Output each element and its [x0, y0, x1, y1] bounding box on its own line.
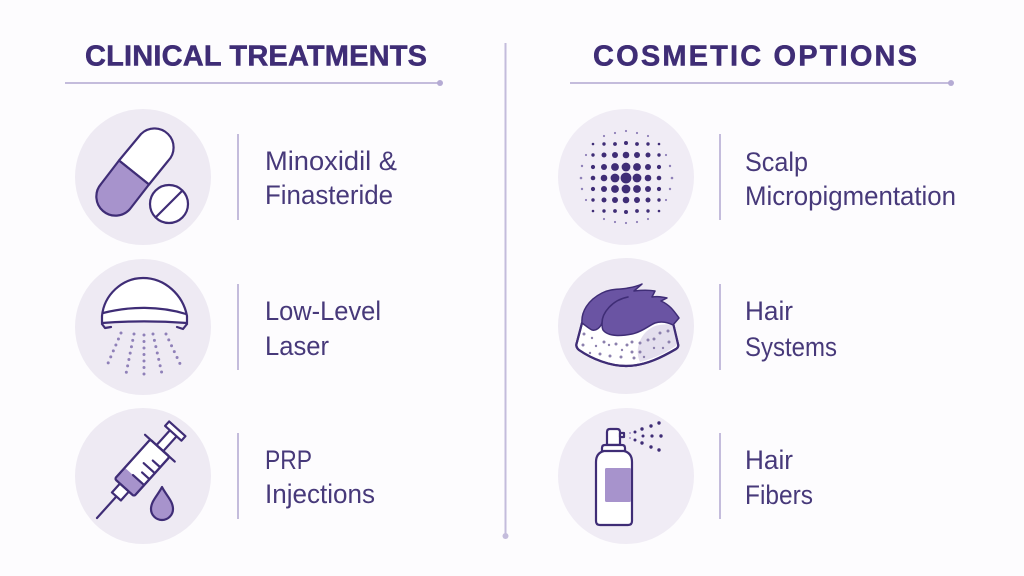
label: Micropigmentation — [745, 181, 956, 211]
label: Injections — [265, 479, 375, 509]
item: scalp micropigmentation — [558, 109, 956, 245]
label: Fibers — [745, 480, 813, 510]
item: prp injections — [75, 408, 375, 544]
item: hair fibers — [558, 408, 813, 544]
heading: cosmetic options — [570, 40, 954, 86]
heading: clinical treatments — [65, 40, 443, 86]
icon: syringe and drop — [82, 415, 192, 531]
item: low-level laser — [75, 259, 381, 395]
label: PRP — [265, 445, 312, 475]
icon: laser cap — [102, 278, 187, 376]
icon: hair piece — [576, 284, 679, 366]
center divider — [502, 43, 508, 539]
heading: clinical treatments: CLINICAL TREATMENTS — [85, 40, 427, 72]
icon: spray can — [596, 421, 663, 525]
item: minoxidil and finasteride — [75, 109, 397, 245]
label: Hair — [745, 445, 793, 475]
label: Finasteride — [265, 180, 393, 210]
icon: capsule and tablet — [96, 128, 188, 223]
label: Systems — [745, 332, 837, 362]
label: Hair — [745, 296, 793, 326]
label: Laser — [265, 331, 329, 361]
icon: halftone dots — [580, 130, 673, 224]
heading: cosmetic options: COSMETIC OPTIONS — [593, 40, 917, 72]
label: Minoxidil & — [265, 146, 397, 176]
label: Scalp — [745, 147, 808, 177]
label: Low-Level — [265, 296, 381, 326]
item: hair systems — [558, 258, 837, 394]
